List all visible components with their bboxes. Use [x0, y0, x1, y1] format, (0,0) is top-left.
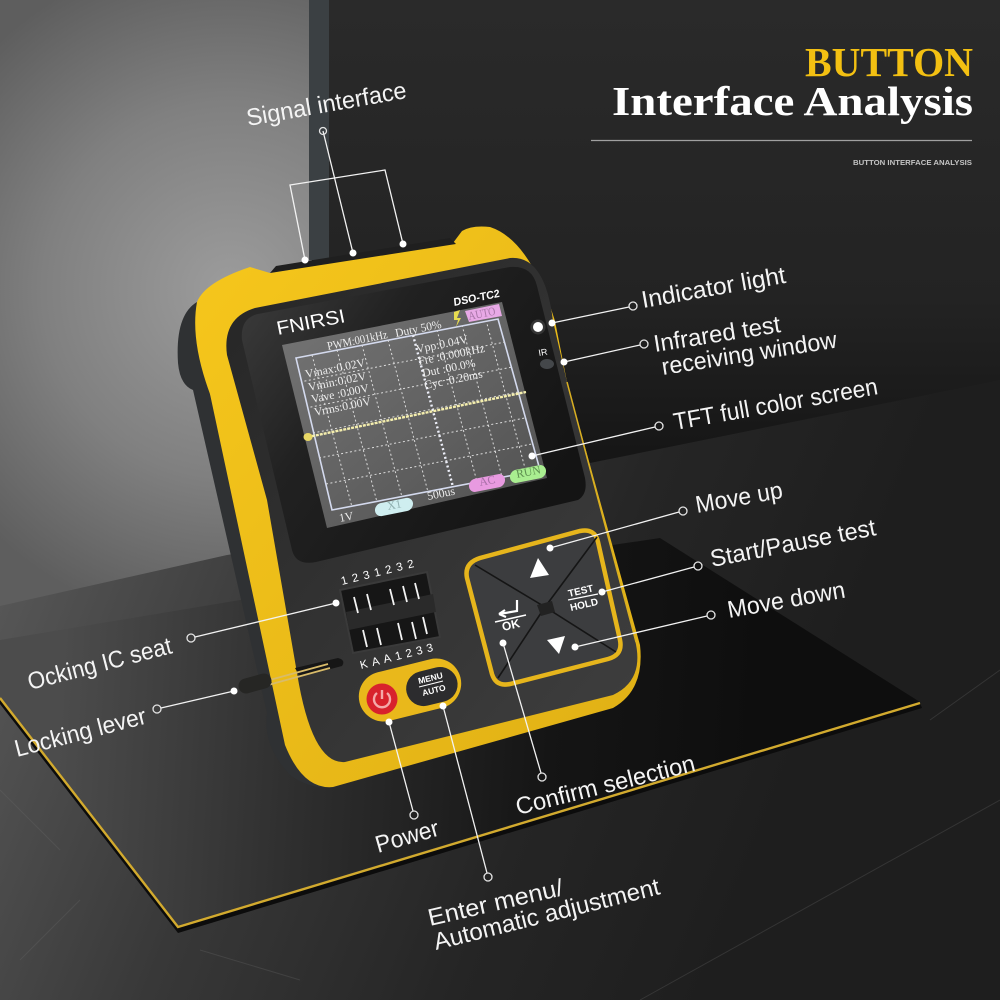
callout: IC seat	[25, 600, 340, 696]
TEST HOLD key label	[567, 583, 599, 614]
model name: DSO-TC2	[453, 288, 500, 309]
IR window: IR	[538, 346, 549, 358]
device: DSO-TC2 tester	[178, 226, 641, 788]
bottom status row: X1	[386, 497, 403, 513]
left readings: Vrms:0.00V	[313, 395, 373, 419]
callout: infrared test: receiving window	[660, 326, 839, 381]
callout: start pause test: Start/Pause test	[708, 514, 878, 573]
lightning mark	[454, 310, 461, 327]
brand logo: FNIRSI	[275, 305, 347, 340]
callout: start pause test	[598, 514, 878, 596]
screen glass	[242, 267, 586, 563]
menu auto button: AUTO	[421, 682, 447, 698]
TEST HOLD key label: TEST	[567, 583, 595, 600]
right readings: Fre :0.000kHz	[417, 342, 486, 368]
bottom status row: AC	[478, 473, 497, 489]
callout: move down: Move down	[725, 577, 847, 624]
TFT screen: Duty 50%	[394, 318, 443, 340]
left readings: Vmax:0.02V	[304, 356, 367, 381]
device yellow shell	[195, 226, 641, 787]
gold side line	[567, 382, 636, 642]
device dark rear side	[178, 302, 335, 788]
callout: infrared test: Infrared test	[652, 311, 783, 358]
subtitle: BUTTON INTERFACE ANALYSIS	[853, 158, 972, 167]
keypad	[467, 530, 620, 685]
callout: signal interface	[244, 77, 409, 264]
bottom status row	[338, 463, 547, 525]
trace marker	[304, 433, 312, 441]
menu auto button: MENU	[417, 670, 444, 686]
down arrow	[547, 636, 565, 654]
bottom status row: 500us	[426, 485, 456, 503]
right readings	[415, 333, 486, 392]
callout: move up	[546, 477, 785, 552]
locking lever	[246, 658, 343, 686]
indicator LED	[530, 320, 546, 334]
callout: indicator light	[548, 262, 788, 326]
callout: enter menu	[425, 702, 663, 956]
callout: enter menu: Enter menu/	[425, 874, 566, 932]
title: Interface Analysis: Interface Analysis	[612, 78, 973, 124]
callout: TFT screen: TFT full color screen	[671, 373, 880, 436]
TEST HOLD key label: HOLD	[569, 597, 599, 614]
power button	[366, 684, 398, 714]
oscilloscope grid	[300, 320, 532, 507]
right readings: Cyc :0.20ms	[423, 367, 484, 392]
OK key label	[495, 600, 526, 634]
signal trace	[308, 392, 526, 437]
TFT screen: AUTO	[467, 305, 497, 323]
TFT screen	[282, 302, 547, 528]
OK key label: OK	[501, 616, 522, 634]
left readings	[304, 356, 373, 419]
socket pin labels bottom: KAA1233	[359, 641, 439, 672]
IC socket	[340, 572, 440, 653]
callout: move down	[572, 577, 847, 650]
right readings: Vpp:0.04V	[415, 333, 470, 356]
menu auto button	[402, 663, 461, 710]
callout: TFT screen	[528, 373, 880, 460]
up arrow	[530, 558, 549, 578]
auto badge	[465, 304, 502, 322]
callout: indicator light: Indicator light	[639, 262, 788, 314]
callout: infrared test	[560, 311, 839, 381]
callout: IC seat: Ocking IC seat	[25, 633, 175, 696]
callout: confirm selection: Confirm selection	[513, 750, 698, 821]
black sheet with gold edge	[0, 538, 922, 933]
bottom status row: RUN	[515, 463, 542, 481]
callout: confirm selection	[500, 640, 698, 821]
socket pin numbers top: 1231232	[340, 557, 420, 588]
callout: enter menu: Automatic adjustment	[431, 873, 663, 956]
right readings: Dut :00.0%	[421, 357, 477, 380]
left readings: Vmin:0.02V	[307, 370, 368, 394]
bottom status row: 1V	[338, 509, 355, 525]
callout: locking lever	[12, 688, 238, 763]
callout: power: Power	[372, 815, 442, 859]
power and menu button pill	[353, 653, 467, 727]
device top dark edge	[270, 238, 456, 273]
callout: move up: Move up	[693, 477, 785, 519]
title: BUTTON: BUTTON	[805, 39, 973, 85]
callout: power	[372, 718, 442, 859]
top status text: PWM:001kHz	[326, 328, 389, 353]
left readings: Vave :0.00V	[310, 382, 371, 406]
callout: signal interface: Signal interface	[244, 77, 409, 132]
IR window	[538, 346, 554, 369]
callout: locking lever: Locking lever	[12, 703, 149, 763]
device front face	[226, 258, 637, 762]
title block	[612, 39, 973, 167]
